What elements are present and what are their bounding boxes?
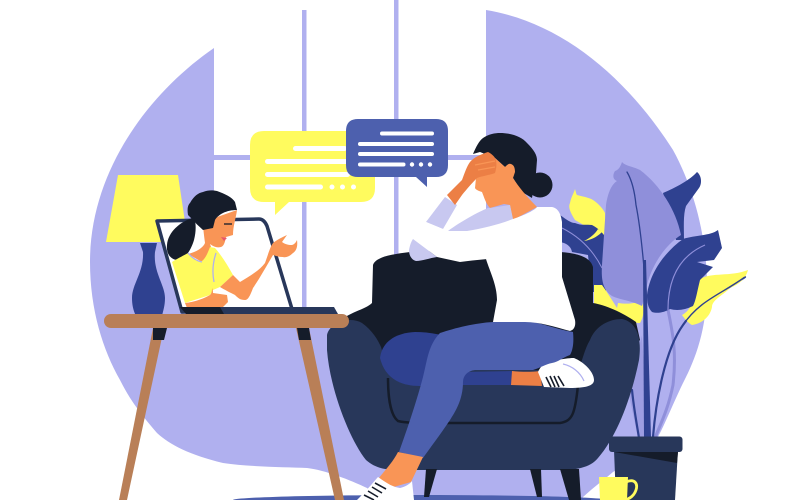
lower hand (185, 288, 228, 308)
chair back (340, 250, 640, 400)
front shoe (357, 477, 414, 500)
yellow leaf lower (594, 285, 643, 323)
leaf veins (668, 245, 705, 310)
floor shadow (233, 495, 607, 500)
cuff (409, 239, 437, 261)
lamp vase (132, 243, 165, 316)
dark leaf top right (663, 172, 701, 240)
collar (188, 253, 202, 262)
back thigh (380, 332, 465, 386)
chair legs (424, 469, 581, 500)
shirt (172, 247, 233, 303)
eye (224, 223, 232, 225)
neck and face (475, 158, 537, 220)
ponytail (167, 218, 196, 260)
ankle (511, 371, 542, 386)
back lower leg (455, 371, 513, 385)
armchair (327, 250, 640, 500)
speech bubble yellow (250, 131, 375, 215)
yellow vein sliver (584, 229, 602, 241)
light stem (628, 335, 648, 438)
vein on dark leaf (562, 228, 602, 268)
arm (220, 235, 297, 300)
stems (627, 172, 745, 438)
window (214, 0, 486, 320)
mouth (221, 237, 227, 241)
front leg (399, 322, 573, 458)
dark leaf left (560, 215, 606, 292)
speech bubble blue (346, 119, 448, 187)
plant (560, 162, 748, 438)
table (104, 314, 349, 500)
left leg (119, 328, 164, 500)
sleeve inner (426, 197, 457, 229)
laptop base (180, 307, 338, 314)
back shoe (538, 358, 594, 388)
laptop screen (157, 219, 292, 312)
head hair (188, 190, 237, 230)
hair (473, 133, 552, 198)
seat cushion line (388, 378, 578, 423)
lamp (106, 175, 188, 316)
person sitting (357, 133, 594, 500)
dark leaf big right (647, 230, 722, 313)
yellow leaf left (569, 189, 606, 238)
raised hand (447, 152, 496, 205)
therapist on screen (167, 190, 297, 308)
chest lavender (448, 205, 513, 236)
chair body (327, 319, 640, 470)
laptop (157, 190, 338, 314)
plant pot (609, 436, 682, 500)
neck and face (188, 210, 237, 262)
background blob (90, 0, 707, 500)
front lower leg (379, 452, 423, 488)
cup (599, 477, 637, 500)
lavender big leaf (602, 162, 681, 306)
right leg (296, 328, 344, 500)
white arm (413, 219, 530, 262)
lamp shade (106, 175, 188, 242)
table top (104, 314, 349, 328)
white torso (486, 207, 575, 331)
yellow leaf right (682, 270, 748, 325)
